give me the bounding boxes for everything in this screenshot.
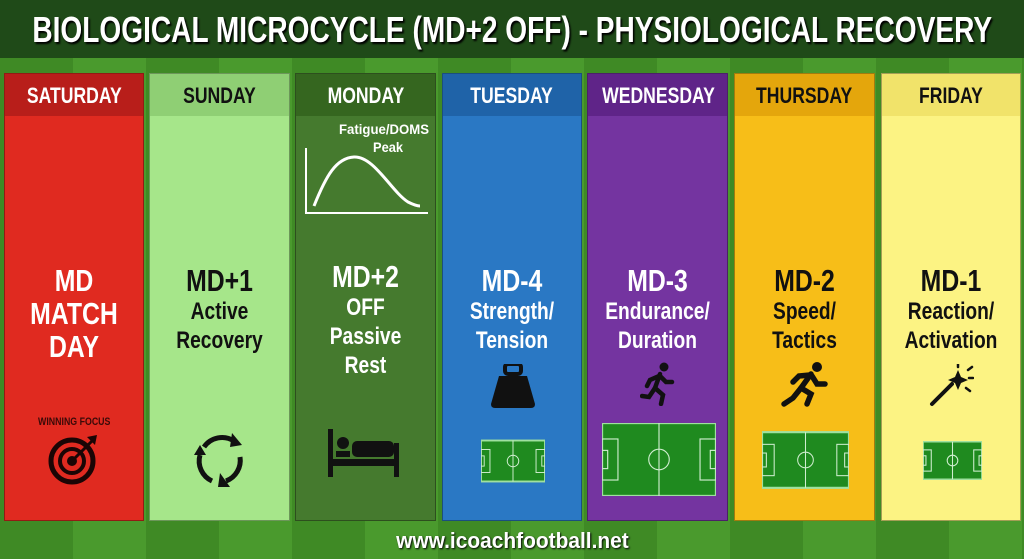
text: MD-1 reaction activation bbox=[905, 263, 997, 354]
text: MD-3 endurance duration: MD-3 bbox=[627, 263, 688, 298]
chart: fatigue curve: Fatigue/DOMS bbox=[339, 121, 429, 137]
text: MD-1 reaction activation: Activation bbox=[905, 327, 997, 354]
text: MD-2 speed tactics: Tactics bbox=[772, 327, 837, 354]
text: MD-1 reaction activation: Reaction/ bbox=[908, 298, 994, 325]
icon: sprinter bbox=[781, 362, 828, 407]
icon: kettlebell weight bbox=[491, 364, 535, 408]
title bar: BIOLOGICAL MICROCYCLE (MD+2 OFF) - PHYSIOLOGICAL RECOVERY bbox=[32, 9, 992, 50]
text: MD-2 speed tactics bbox=[772, 263, 837, 354]
panel: saturday bbox=[4, 73, 144, 521]
header: tuesday: TUESDAY bbox=[471, 83, 553, 108]
header: saturday bbox=[5, 74, 143, 116]
text: MD-3 endurance duration bbox=[605, 263, 710, 354]
text: MD match day: MD bbox=[55, 263, 93, 298]
panel: tuesday bbox=[442, 73, 582, 521]
icon: magic wand bbox=[930, 364, 974, 406]
header: friday: FRIDAY bbox=[919, 83, 983, 108]
header: monday bbox=[296, 74, 435, 116]
text: MD-1 reaction activation: MD-1 bbox=[921, 263, 981, 298]
text: MD-2 speed tactics: Speed/ bbox=[773, 298, 836, 325]
icon: recycle arrows bbox=[194, 433, 243, 487]
text: MD-4 strength tension bbox=[470, 263, 554, 354]
icon: medium pitch bbox=[762, 431, 849, 489]
text: MD+1 active recovery bbox=[176, 263, 263, 354]
text: MD+1 active recovery: Active bbox=[191, 298, 248, 325]
header: thursday: THURSDAY bbox=[756, 83, 853, 108]
text: MD-4 strength tension: Strength/ bbox=[470, 298, 554, 325]
header: wednesday bbox=[588, 74, 727, 116]
panel: monday bbox=[295, 73, 436, 521]
text: MD-4 strength tension: Tension bbox=[476, 327, 548, 354]
header: monday: MONDAY bbox=[327, 83, 404, 108]
text: MD+2 off passive rest: Rest bbox=[345, 352, 386, 379]
header: saturday: SATURDAY bbox=[27, 83, 121, 108]
header: sunday: SUNDAY bbox=[183, 83, 256, 108]
header: wednesday: WEDNESDAY bbox=[602, 83, 715, 108]
text: MD+2 off passive rest: Passive bbox=[330, 323, 401, 350]
text: MD match day: MATCH bbox=[30, 296, 118, 331]
label: winning focus: WINNING FOCUS bbox=[38, 416, 110, 428]
icon: bed bbox=[328, 429, 399, 477]
text: MD-3 endurance duration: Endurance/ bbox=[605, 298, 710, 325]
header: thursday bbox=[735, 74, 874, 116]
icon: large pitch bbox=[602, 423, 716, 496]
text: MD+1 active recovery: Recovery bbox=[176, 327, 263, 354]
panel: friday bbox=[881, 73, 1021, 521]
text: MD-4 strength tension: MD-4 bbox=[482, 263, 542, 298]
text: MD+1 active recovery: MD+1 bbox=[186, 263, 253, 298]
header: tuesday bbox=[443, 74, 581, 116]
panel: thursday bbox=[734, 73, 875, 521]
text: MD-3 endurance duration: Duration bbox=[618, 327, 697, 354]
title bar bbox=[0, 0, 1024, 58]
header: sunday bbox=[150, 74, 289, 116]
panel: wednesday bbox=[587, 73, 728, 521]
text: MD+2 off passive rest: MD+2 bbox=[332, 259, 399, 294]
header: friday bbox=[882, 74, 1020, 116]
chart: fatigue curve bbox=[305, 121, 429, 214]
panel: sunday bbox=[149, 73, 290, 521]
text: MD+2 off passive rest bbox=[330, 259, 401, 379]
footer url: www.icoachfootball.net bbox=[396, 528, 628, 553]
icon: tiny pitch bbox=[923, 441, 982, 480]
text: MD-2 speed tactics: MD-2 bbox=[774, 263, 835, 298]
icon: small pitch bbox=[481, 440, 545, 482]
icon: runner bbox=[640, 362, 674, 406]
text: MD+2 off passive rest: OFF bbox=[346, 294, 385, 321]
text: MD match day: DAY bbox=[49, 329, 99, 364]
icon: target bbox=[48, 435, 97, 484]
text: MD match day bbox=[30, 263, 118, 364]
chart: fatigue curve: Peak bbox=[373, 139, 403, 155]
